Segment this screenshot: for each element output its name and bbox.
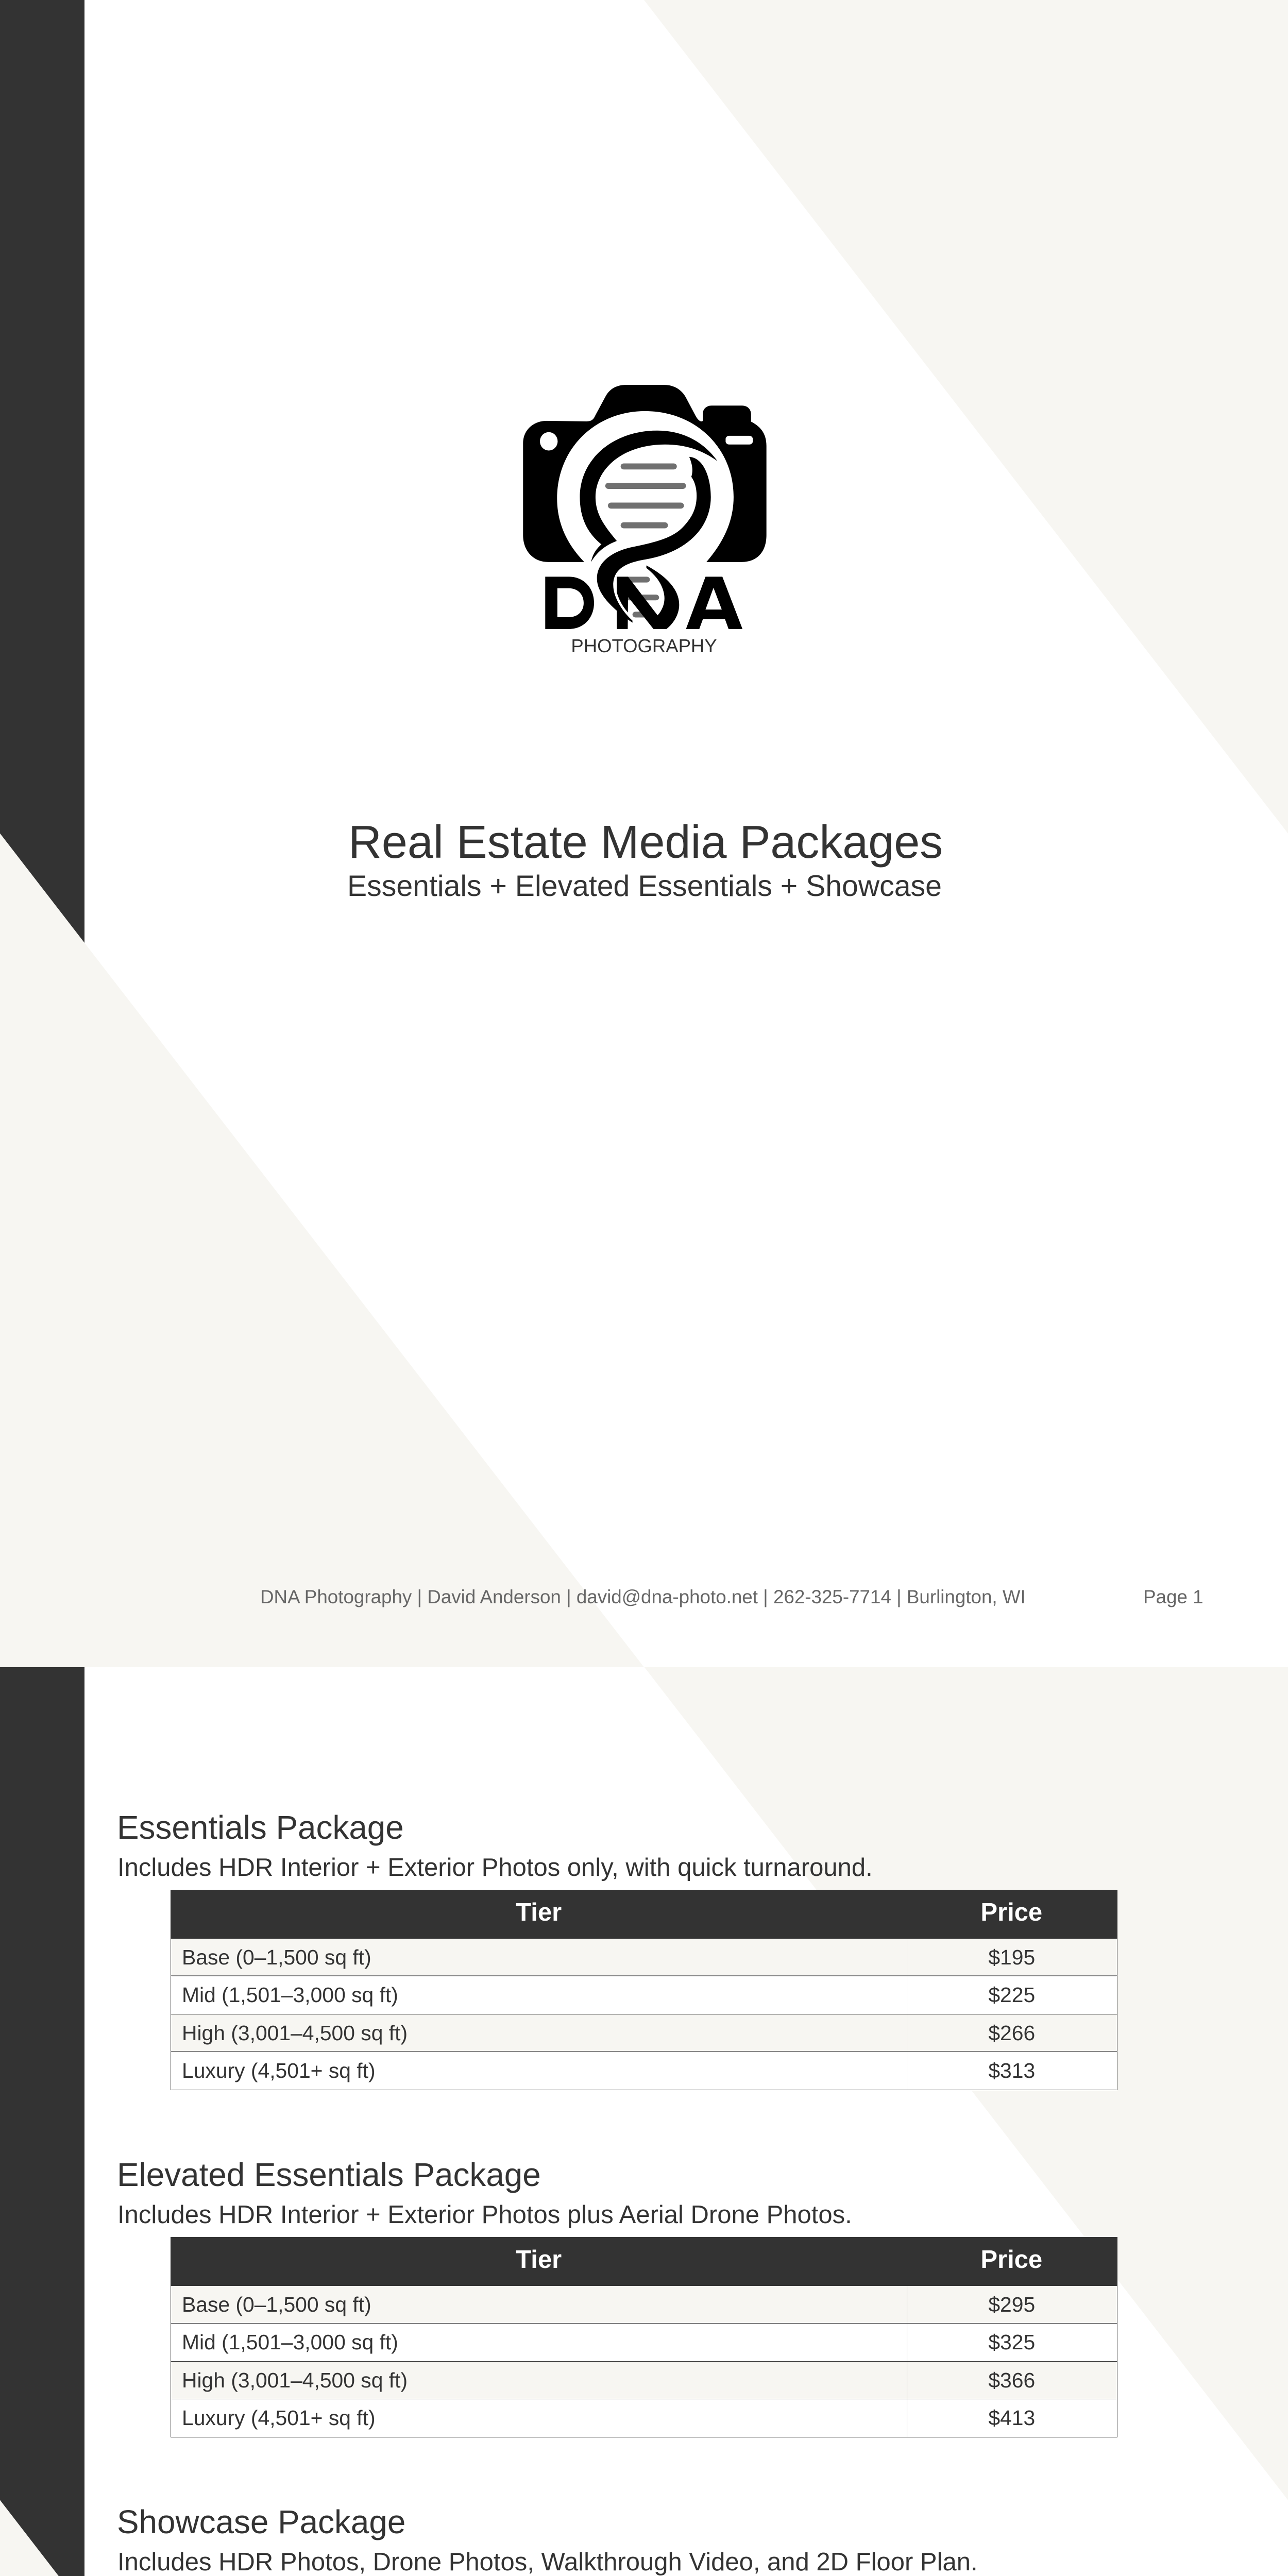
row: high: $266 bbox=[988, 2021, 1035, 2044]
subtitle: Essentials + Elevated Essentials + Showcase bbox=[347, 870, 942, 903]
footer: page number 1: Page 1 bbox=[1143, 1586, 1204, 1607]
row: base bbox=[171, 1938, 1117, 1976]
table: elevated essentials pricing bbox=[171, 2237, 1117, 2437]
footer: page 1 contact: DNA Photography | David Anderson | david@dna-photo.net | 262-325-7714 | Burlington, WI bbox=[260, 1586, 1026, 1607]
row: mid: Mid (1,501–3,000 sq ft) bbox=[182, 1983, 398, 2007]
row: mid: $225 bbox=[988, 1983, 1035, 2007]
row: luxury: $413 bbox=[988, 2406, 1035, 2430]
heading: essentials: Essentials Package bbox=[117, 1809, 404, 1846]
table: essentials pricing bbox=[171, 1890, 1117, 2090]
row: high: $366 bbox=[988, 2368, 1035, 2392]
row: high: High (3,001–4,500 sq ft) bbox=[182, 2368, 408, 2392]
table header row: Price bbox=[980, 1899, 1042, 1926]
table header row bbox=[171, 1890, 1117, 1938]
table header row: Tier bbox=[516, 2246, 562, 2274]
row: mid bbox=[171, 1976, 1117, 2014]
table header row: Tier bbox=[516, 1899, 562, 1926]
row: mid bbox=[171, 2324, 1117, 2362]
description: elevated essentials: Includes HDR Interior + Exterior Photos plus Aerial Drone Photos. bbox=[117, 2201, 852, 2229]
description: showcase: Includes HDR Photos, Drone Photos, Walkthrough Video, and 2D Floor Plan. bbox=[117, 2548, 978, 2576]
row: luxury bbox=[171, 2052, 1117, 2090]
table header row bbox=[171, 2237, 1117, 2285]
row: mid: $325 bbox=[988, 2330, 1035, 2354]
row: base: Base (0–1,500 sq ft) bbox=[182, 1945, 371, 1969]
row: luxury bbox=[171, 2399, 1117, 2437]
title: Real Estate Media Packages bbox=[348, 817, 943, 868]
row: high: High (3,001–4,500 sq ft) bbox=[182, 2021, 408, 2044]
row: high bbox=[171, 2014, 1117, 2052]
page 1 background bbox=[0, 0, 1288, 1667]
row: luxury: Luxury (4,501+ sq ft) bbox=[182, 2059, 376, 2082]
row: high bbox=[171, 2362, 1117, 2399]
row: base: $295 bbox=[988, 2293, 1035, 2316]
row: luxury: Luxury (4,501+ sq ft) bbox=[182, 2406, 376, 2430]
page 2 background bbox=[0, 1667, 1288, 2576]
heading: showcase: Showcase Package bbox=[117, 2503, 405, 2540]
table header row: Price bbox=[980, 2246, 1042, 2274]
row: base: $195 bbox=[988, 1945, 1035, 1969]
heading: elevated essentials: Elevated Essentials Package bbox=[117, 2156, 541, 2193]
logo: DNA Photography camera: PHOTOGRAPHY bbox=[571, 635, 717, 656]
row: mid: Mid (1,501–3,000 sq ft) bbox=[182, 2330, 398, 2354]
row: base: Base (0–1,500 sq ft) bbox=[182, 2293, 371, 2316]
logo: DNA Photography camera bbox=[523, 385, 767, 656]
row: base bbox=[171, 2285, 1117, 2324]
description: essentials: Includes HDR Interior + Exterior Photos only, with quick turnaround. bbox=[117, 1854, 873, 1882]
row: luxury: $313 bbox=[988, 2059, 1035, 2082]
